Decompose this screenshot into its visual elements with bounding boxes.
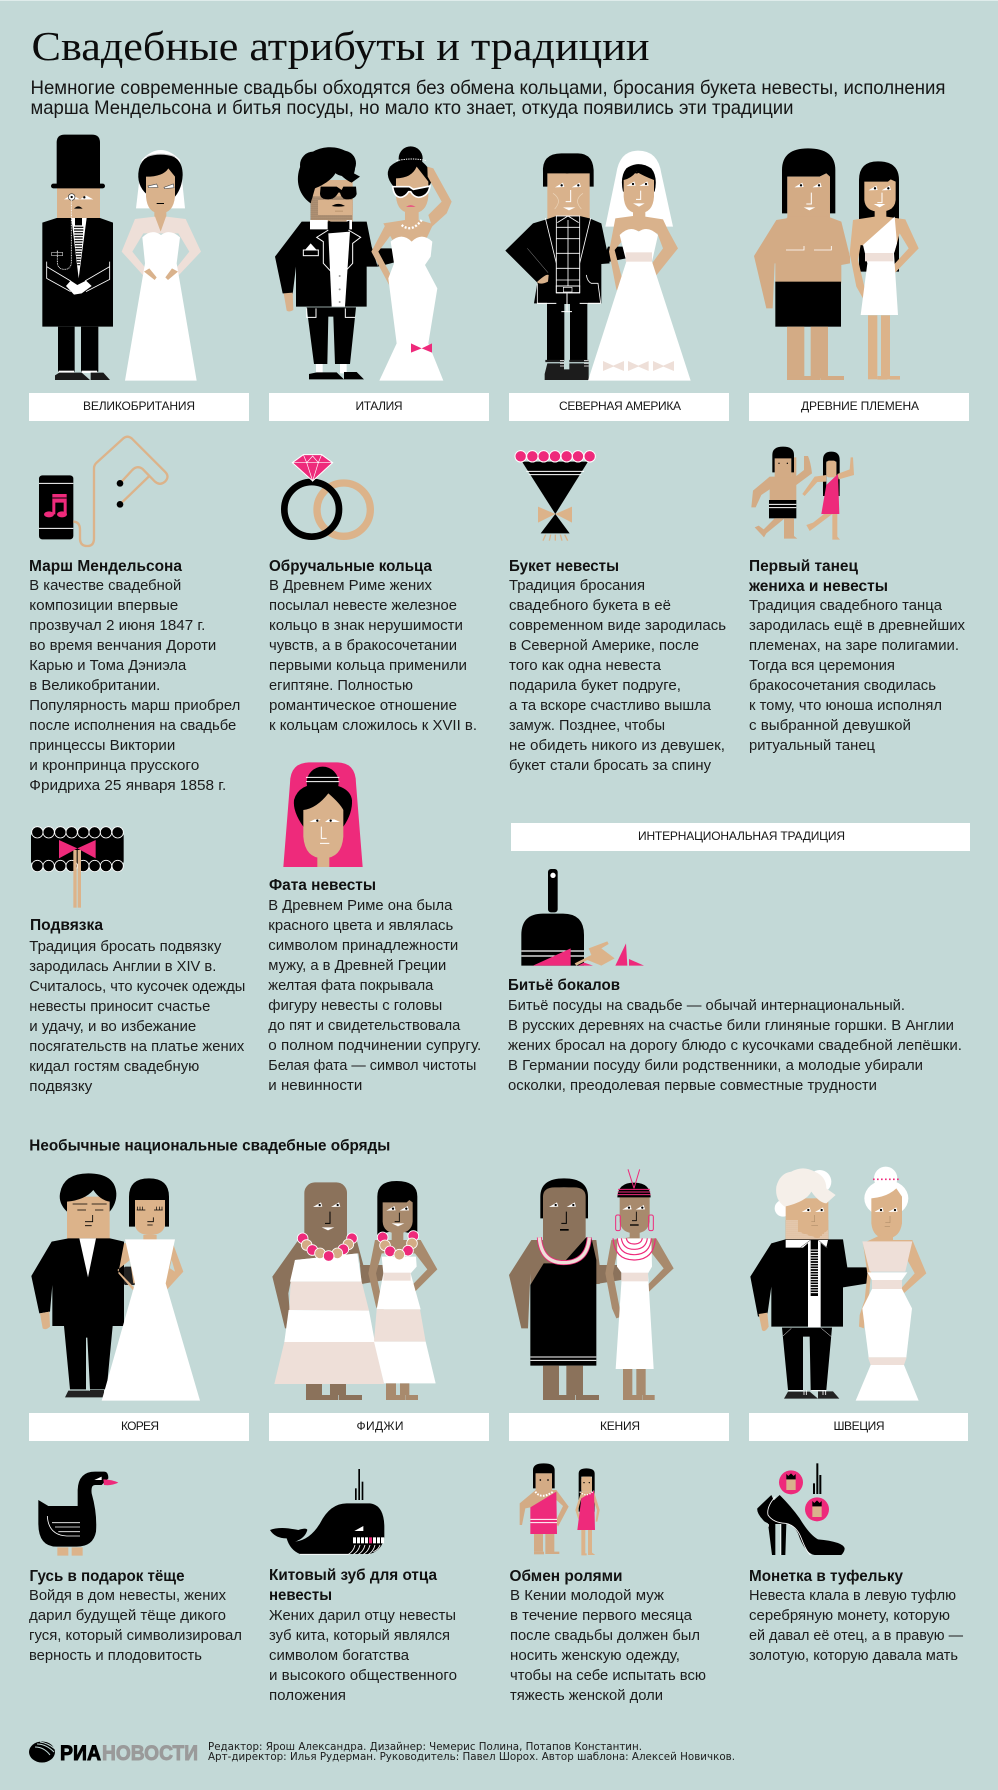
heading: Фата невесты: Фата невесты [269,877,376,894]
icon: role-swapped couple [520,1463,600,1555]
title: Свадебные атрибуты и традиции [32,23,650,69]
text: Обмен ролями: тяжесть женской доли [510,1687,663,1704]
text: Обмен ролями: В Кении молодой муж [510,1587,664,1604]
label band: Интернациональная традиция [511,823,970,851]
couple: Korea [31,1173,200,1401]
icon: bride in veil [283,762,363,867]
text: Первый танец: зародилась ещё в древнейших [749,617,965,634]
icon: dancing couple [751,447,854,540]
text: Марш Мендельсона: В качестве свадебной [29,577,181,594]
credits [208,1740,735,1763]
text: Марш Мендельсона: Карью и Тома Дэниэла [29,657,187,674]
text: Подвязка: зародилась Англии в XIV в. [29,958,216,975]
text: Монетка в туфельку: золотую, которую давала мать [749,1647,958,1664]
icon: bouquet [515,451,595,541]
heading: Подвязка: Подвязка [30,917,103,934]
text: Обмен ролями: после свадьбы должен был [510,1627,700,1644]
label band: Древние племена: ДРЕВНИЕ ПЛЕМЕНА [801,399,919,413]
text: Букет невесты: букет стали бросать за спину [509,757,711,774]
text: Подвязка [29,938,245,1095]
label band: Фиджи: ФИДЖИ [356,1419,404,1433]
text: Марш Мендельсона: и кронпринца прусского [29,757,199,774]
text: Монетка в туфельку: ей давал её отец, а в правую — [749,1627,963,1644]
text: Подвязка: Традиция бросать подвязку [29,938,222,955]
text: Фата невесты: желтая фата покрывала [268,977,434,994]
text: Фата невесты: В Древнем Риме она была [268,897,453,914]
logo: РИА Новости: РИА [60,1742,101,1765]
text: Букет невесты: в Северной Америке, после [509,637,699,654]
text: Марш Мендельсона: композиции впервые [29,597,178,614]
text: Первый танец: с выбранной девушкой [749,717,911,734]
text: Обмен ролями: носить женскую одежду, [510,1647,680,1664]
logo: РИА Новости [29,1742,198,1765]
couple: Kenya [509,1169,674,1400]
label band: Кения: КЕНИЯ [600,1419,640,1433]
text: Первый танец: племенах, на заре полигамии. [749,637,959,654]
label band: Корея [29,1413,249,1441]
intro text: Немногие современные свадьбы обходятся без обмена кольцами, бросания букета невесты, исполнения [30,77,946,99]
label band: Швеция [749,1413,968,1441]
text: Монетка в туфельку [749,1587,963,1664]
text: Марш Мендельсона: принцессы Виктории [29,737,175,754]
icon: shoes and coins [757,1463,845,1555]
text: Обмен ролями [510,1587,706,1704]
text: Марш Мендельсона: в Великобритании. [29,677,160,694]
text: Букет невесты: того как одна невеста [509,657,662,674]
text: Первый танец: Тогда вся церемония [749,657,895,674]
couple: ancient tribes [754,148,919,380]
heading: Марш Мендельсона: Марш Мендельсона [29,558,182,575]
text: Подвязка: невесты приносит счастье [29,998,210,1015]
text: Битьё бокалов: осколки, преодолевая первые совместные трудности [508,1077,877,1094]
credits: Арт-директор: Илья Рудерман. Руководитель: Павел Шорох. Автор шаблона: Алексей Новичков. [208,1750,735,1763]
text: Фата невесты: и невинности [268,1077,362,1094]
heading: Монетка в туфельку: Монетка в туфельку [749,1568,903,1585]
text: Битьё бокалов: В Германии посуду били родственники, а молодые убирали [508,1057,923,1074]
text: Фата невесты: мужу, а в Древней Греции [268,957,446,974]
label band: Фиджи [269,1413,489,1441]
text: Подвязка: подвязку [29,1078,93,1095]
text: Фата невесты: фигуру невесты с головы [268,997,442,1014]
icon: goose [38,1472,118,1556]
text: Букет невесты: подарила букет подруге, [509,677,681,694]
label band: Интернациональная традиция: ИНТЕРНАЦИОНАЛЬНАЯ ТРАДИЦИЯ [638,829,845,843]
icon: garter [31,827,124,908]
heading: Первый танец: жениха и невесты [748,578,888,595]
text: Букет невесты: а та вскоре счастливо вышла [509,697,712,714]
text: Китовый зуб: и высокого общественного [269,1667,457,1684]
text: Обручальные кольца: В Древнем Риме жених [269,577,432,594]
text: Первый танец: бракосочетания сводилась [749,677,936,694]
text: Обручальные кольца: египтяне. Полностью [269,677,413,694]
text: Китовый зуб: положения [269,1687,346,1704]
section heading: Необычные национальные свадебные обряды [29,1138,390,1154]
text: Гусь в подарок тёще: верность и плодовитость [29,1647,202,1664]
text: Букет невесты: современном виде зародилась [509,617,726,634]
text: Битьё бокалов: Битьё посуды на свадьбе — обычай интернациональный. [508,997,905,1014]
text: Подвязка: кидал гостям свадебную [29,1058,199,1075]
text: Обручальные кольца [269,577,477,734]
label band: Корея: КОРЕЯ [121,1419,159,1433]
text: Гусь в подарок тёще: Войдя в дом невесты, жених [29,1587,226,1604]
text: Подвязка: посягательств на платье жених [29,1038,245,1055]
text: Букет невесты: замуж. Позднее, чтобы [509,717,665,734]
text: Букет невесты: не обидеть никого из девушек, [509,737,725,754]
text: Фата невесты [268,897,481,1094]
heading: Первый танец: Первый танец [749,558,858,575]
text: Подвязка: и удачу, и во избежание [29,1018,196,1035]
heading: Обмен ролями: Обмен ролями [510,1568,622,1585]
heading: Гусь в подарок тёще: Гусь в подарок тёще [30,1568,185,1585]
text: Марш Мендельсона: Фридриха 25 января 1858 г. [29,777,226,794]
text: Обручальные кольца: посылал невесте железное [269,597,457,614]
icon: phone with earphones [39,437,167,546]
label band: Северная Америка: СЕВЕРНАЯ АМЕРИКА [559,399,681,413]
label band: Италия [269,393,489,421]
text: Марш Мендельсона: во время венчания Дороти [29,637,216,654]
text: Фата невесты: красного цвета и являлась [268,917,453,934]
label band: Северная Америка [509,393,729,421]
couple: Sweden [750,1167,926,1401]
couple: Italy [275,146,452,381]
label band: Швеция: ШВЕЦИЯ [834,1419,884,1433]
text: Гусь в подарок тёще: гуся, который символизировал [29,1627,242,1644]
text: Обручальные кольца: кольцо в знак нерушимости [269,617,463,634]
text: Китовый зуб: зуб кита, который являлся [269,1627,450,1644]
heading: Китовый зуб: невесты [269,1587,332,1604]
text: Первый танец: к тому, что юноша исполнял [749,697,942,714]
text: Первый танец: Традиция свадебного танца [749,597,943,614]
text: Битьё бокалов: жених бросал на дорогу блюдо с кусочками свадебной лепёшки. [508,1037,962,1054]
icon: dustpan with shards [521,869,644,966]
text: Марш Мендельсона [29,577,240,794]
text: Монетка в туфельку: Невеста клала в левую туфлю [749,1587,956,1604]
icon: wedding rings [284,455,370,537]
text: Букет невесты: свадебного букета в её [509,597,671,614]
text: Обручальные кольца: к кольцам сложилось к XVII в. [269,717,477,734]
label band: Кения [509,1413,729,1441]
text: Марш Мендельсона: после исполнения на свадьбе [29,717,236,734]
text: Китовый зуб: Жених дарил отцу невесты [269,1607,456,1624]
intro text [30,77,946,119]
text: Обручальные кольца: романтическое отношение [269,697,457,714]
heading: Обручальные кольца: Обручальные кольца [269,558,432,575]
text: Обручальные кольца: первыми кольца применили [269,657,467,674]
label band: Великобритания [29,393,249,421]
heading: Первый танец [748,558,888,595]
text: Китовый зуб [269,1607,457,1704]
text: Первый танец [749,597,965,754]
intro text: марша Мендельсона и битья посуды, но мало кто знает, откуда появились эти традиции [30,97,794,119]
label band: Италия: ИТАЛИЯ [356,399,402,413]
text: Китовый зуб: символом богатства [269,1647,410,1664]
text: Битьё бокалов [508,997,962,1094]
text: Фата невесты: Белая фата — символ чистоты [268,1057,476,1074]
text: Фата невесты: до пят и свидетельствовала [268,1017,461,1034]
heading: Китовый зуб: Китовый зуб для отца [269,1567,437,1584]
label band: Великобритания: ВЕЛИКОБРИТАНИЯ [83,399,195,413]
heading: Букет невесты: Букет невесты [509,558,619,575]
text: Обмен ролями: в течение первого месяца [510,1607,693,1624]
text: Букет невесты: Традиция бросания [509,577,645,594]
couple: Fiji [272,1181,437,1400]
heading: Китовый зуб [269,1567,437,1604]
text: Гусь в подарок тёще: дарил будущей тёще дикого [29,1607,226,1624]
text: Фата невесты: о полном подчинении супругу. [268,1037,481,1054]
label band: Древние племена [749,393,969,421]
couple: North America [505,151,691,381]
text: Подвязка: Считалось, что кусочек одежды [29,978,245,995]
text: Монетка в туфельку: серебряную монету, которую [749,1607,950,1624]
text: Гусь в подарок тёще [29,1587,242,1664]
heading: Битьё бокалов: Битьё бокалов [508,977,620,994]
text: Обручальные кольца: чувств, а в бракосочетании [269,637,457,654]
text: Фата невесты: символом принадлежности [268,937,458,954]
text: Букет невесты [509,577,726,774]
text: Битьё бокалов: В русских деревнях на счастье били глиняные горшки. В Англии [508,1017,954,1034]
text: Марш Мендельсона: прозвучал 2 июня 1847 г. [29,617,205,634]
text: Обмен ролями: чтобы на себе испытать всю [510,1667,706,1684]
logo: РИА Новости: НОВОСТИ [102,1742,198,1765]
credits: Редактор: Ярош Александра. Дизайнер: Чемерис Полина, Потапов Константин. [208,1740,642,1753]
text: Первый танец: ритуальный танец [749,737,875,754]
icon: whale [270,1469,384,1554]
couple: Great Britain [42,135,201,381]
text: Марш Мендельсона: Популярность марш приобрел [29,697,240,714]
